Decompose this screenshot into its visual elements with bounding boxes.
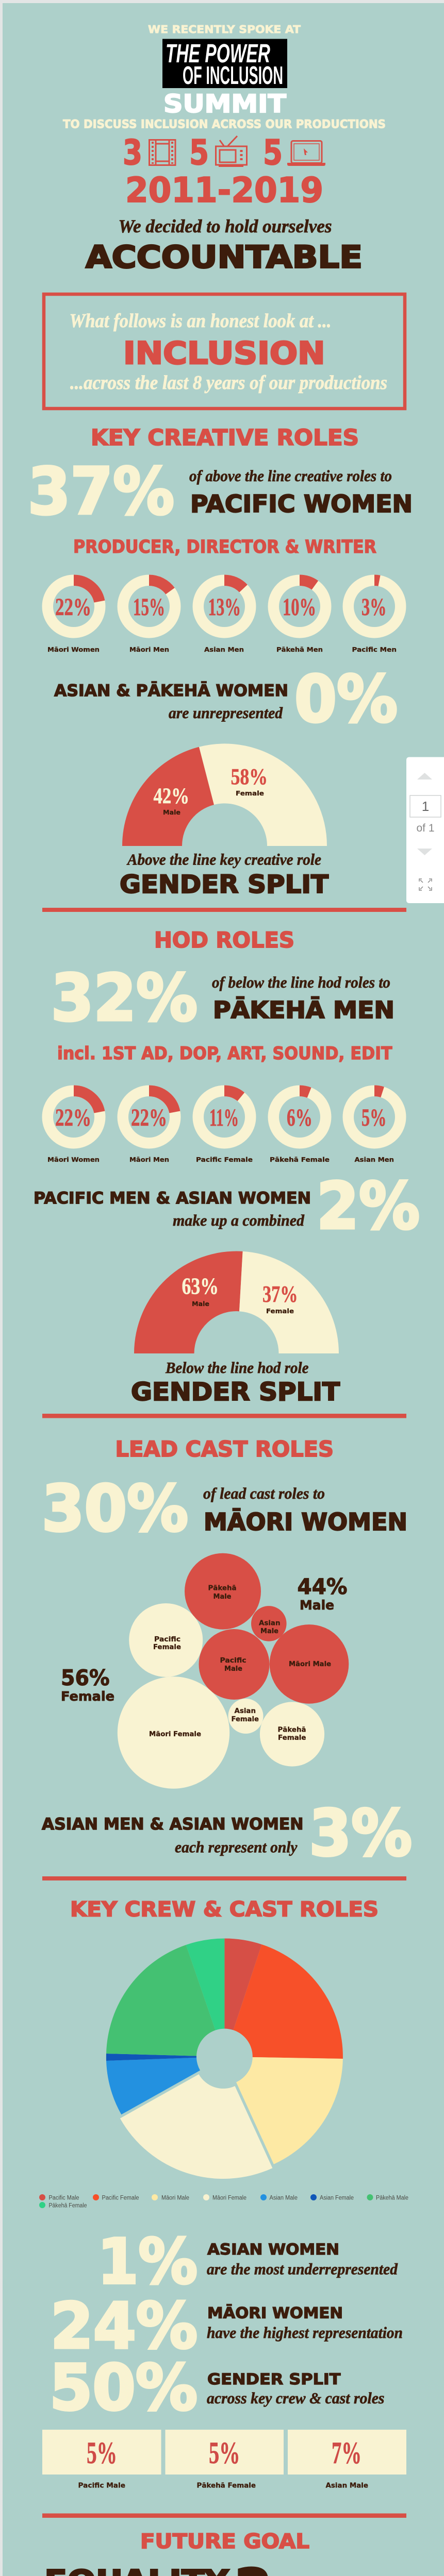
logo: the power of inclusion <box>162 39 287 90</box>
chart: crew and cast donut <box>106 1938 343 2179</box>
stat: 37 percent: 37% <box>28 454 174 529</box>
chart: gender split half donut: 42% <box>154 784 189 808</box>
header: summit intro <box>63 23 386 275</box>
stat: 50 percent: 50% <box>50 2351 198 2425</box>
text: across the last 8 years: ...across the last 8 years of our productions <box>70 372 387 394</box>
chart: bubble chart <box>61 1553 349 1789</box>
production counts with icons: 5 <box>263 132 283 173</box>
donut chart row: 15% <box>133 594 165 621</box>
chart: bubble chart: Pacific <box>220 1657 246 1665</box>
chart: bubble chart: 44% <box>297 1574 348 1599</box>
donut chart row: Pacific Female <box>196 1156 253 1163</box>
donut chart row: 13% <box>208 594 241 621</box>
chart: bubble chart: Māori Male <box>289 1660 331 1668</box>
chart: gender split half donut <box>122 743 327 846</box>
text: above the line: of above the line creative roles to <box>189 467 392 485</box>
chart: bubble chart: Female <box>61 1689 114 1704</box>
donut chart row: Pacific Men <box>352 646 397 653</box>
text: asian and pakeha women: ASIAN & PĀKEHĀ WOMEN <box>54 682 288 700</box>
chart legend: Asian Female <box>320 2195 354 2201</box>
chart legend: Pākehā Male <box>376 2195 408 2201</box>
text: maori women: MĀORI WOMEN <box>207 2304 343 2321</box>
section: key creative roles <box>28 425 413 899</box>
donut chart row: 22% <box>55 594 91 621</box>
chart: gender split half donut: Male <box>192 1300 209 1308</box>
stat boxes: 7% <box>332 2436 361 2470</box>
stat: 2 percent: 2% <box>317 1169 420 1244</box>
text: gender split: GENDER SPLIT <box>207 2370 341 2388</box>
chart: bubble chart: Pākehā <box>208 1585 236 1592</box>
stat boxes: 5% <box>87 2436 117 2470</box>
donut chart row: Asian Men <box>204 646 244 653</box>
text: make up a combined: make up a combined <box>173 1211 304 1229</box>
text: asian men and asian women: ASIAN MEN & ASIAN WOMEN <box>42 1815 303 1834</box>
text: accountable: ACCOUNTABLE <box>86 239 363 275</box>
chart: gender split half donut: 58% <box>231 764 268 789</box>
text: below the line: of below the line hod roles to <box>212 973 390 991</box>
chart: bubble chart: Pacific <box>154 1636 180 1643</box>
text: gender split: GENDER SPLIT <box>120 870 328 899</box>
chart: bubble chart: Male <box>224 1665 242 1673</box>
donut chart row: Māori Women <box>47 1156 100 1163</box>
text: date range: 2011-2019 <box>125 170 323 210</box>
chart: bubble chart: Female <box>153 1643 181 1651</box>
icon: television <box>216 136 246 166</box>
text: of lead cast roles: of lead cast roles to <box>203 1484 325 1502</box>
subheading: PRODUCER, DIRECTOR & WRITER <box>73 537 376 557</box>
donut chart row <box>47 1091 401 1163</box>
chart: bubble chart: Male <box>300 1598 334 1613</box>
text: most underrepresented: are the most underrepresented <box>207 2260 398 2278</box>
donut chart row: 22% <box>131 1104 167 1131</box>
section: future goal <box>36 2530 410 2576</box>
donut chart row: Pākehā Female <box>270 1156 330 1163</box>
chart legend: Māori Female <box>212 2195 246 2201</box>
text: gender split: GENDER SPLIT <box>131 1378 340 1406</box>
page control widget: of 1 <box>416 822 435 834</box>
page control widget <box>406 757 444 903</box>
chart legend: Pākehā Female <box>48 2203 87 2209</box>
donut chart row: 5% <box>361 1104 387 1131</box>
text: maori women: MĀORI WOMEN <box>204 1508 407 1536</box>
panel: inclusion callout <box>44 294 405 409</box>
text: pacific women: PACIFIC WOMEN <box>190 490 413 518</box>
chart: bubble chart: Female <box>231 1716 259 1723</box>
chart: gender split half donut: Female <box>266 1307 294 1315</box>
chart: bubble chart: Asian <box>259 1620 281 1627</box>
production counts with icons: 3 <box>123 132 142 173</box>
stat boxes: Pacific Male <box>78 2482 125 2489</box>
chart: gender split half donut: Male <box>163 808 180 816</box>
stat: 1 percent: 1% <box>97 2227 198 2298</box>
stat boxes: Asian Male <box>326 2482 368 2489</box>
section: key crew and cast roles <box>39 1898 408 2489</box>
donut chart row: Māori Men <box>129 1156 169 1163</box>
chart legend: Māori Male <box>161 2195 189 2201</box>
donut chart row: 22% <box>55 1104 91 1131</box>
stat boxes: 5% <box>209 2436 240 2470</box>
chart legend: Pacific Male <box>48 2195 79 2201</box>
text: above the line split: Above the line key creative role <box>126 850 321 869</box>
chart: bubble chart: Pākehā <box>277 1726 306 1734</box>
donut chart row: 10% <box>283 594 316 621</box>
chart: bubble chart: Male <box>260 1628 278 1635</box>
text: to discuss inclusion: TO DISCUSS INCLUSION ACROSS OUR PRODUCTIONS <box>63 118 386 131</box>
text: each represent only: each represent only <box>175 1838 298 1856</box>
heading: FUTURE GOAL <box>140 2530 309 2553</box>
stat: 24 percent: 24% <box>51 2290 198 2363</box>
text: are unrepresented: are unrepresented <box>169 704 283 722</box>
donut chart row: 6% <box>287 1104 313 1131</box>
text: pakeha men: PĀKEHĀ MEN <box>213 996 394 1024</box>
donut chart row: Māori Women <box>47 646 100 653</box>
stat boxes <box>42 2430 406 2489</box>
chart: gender split half donut: 37% <box>262 1281 298 1307</box>
chart legend: Asian Male <box>269 2195 298 2201</box>
stat: 0 percent: 0% <box>294 662 398 737</box>
stat boxes: Pākehā Female <box>197 2482 256 2489</box>
production counts with icons <box>123 132 325 173</box>
stat: 32 percent: 32% <box>51 961 198 1036</box>
text: summit: SUMMIT <box>163 90 286 118</box>
chart legend <box>39 2194 408 2209</box>
donut chart row: 3% <box>361 594 387 621</box>
heading: KEY CREATIVE ROLES <box>91 425 359 451</box>
text: across key crew: across key crew & cast roles <box>207 2389 385 2407</box>
logo: the power of inclusion: THE POWER <box>166 39 270 68</box>
stat: 3 percent: 3% <box>309 1797 412 1871</box>
chart: bubble chart: Male <box>213 1593 232 1601</box>
donut chart row: 11% <box>209 1104 239 1131</box>
chart: bubble chart: Māori Female <box>149 1731 201 1738</box>
subheading: incl. 1ST AD, DOP, ART, SOUND, EDIT <box>57 1043 392 1064</box>
donut chart row: Pākehā Men <box>276 646 323 653</box>
section: hod roles <box>34 927 420 1406</box>
heading: KEY CREW & CAST ROLES <box>70 1898 379 1922</box>
icon: film strip <box>150 140 175 165</box>
page control widget: 1 <box>422 799 429 814</box>
chart: bubble chart: 56% <box>61 1665 109 1690</box>
stat: 30 percent: 30% <box>42 1472 188 1546</box>
text: highest representation: have the highest representation <box>207 2324 403 2342</box>
donut chart row <box>47 580 401 653</box>
heading: HOD ROLES <box>154 927 294 953</box>
text: inclusion: INCLUSION <box>123 335 325 371</box>
text: we recently spoke at: WE RECENTLY SPOKE AT <box>148 23 301 36</box>
chart: gender split half donut: Female <box>236 789 264 797</box>
chart: gender split half donut <box>134 1251 339 1353</box>
text: asian women: ASIAN WOMEN <box>207 2241 339 2258</box>
text: what follows: What follows is an honest look at ... <box>69 310 331 332</box>
text: pacific men and asian women: PACIFIC MEN & ASIAN WOMEN <box>34 1189 311 1208</box>
chart: bubble chart: Female <box>278 1734 306 1742</box>
icon: laptop <box>287 141 325 166</box>
section: lead cast roles <box>42 1436 412 1871</box>
donut chart row: Māori Men <box>129 646 169 653</box>
donut chart row: Asian Men <box>355 1156 394 1163</box>
logo: the power of inclusion: OF INCLUSION <box>183 62 283 90</box>
chart legend: Pacific Female <box>102 2195 139 2201</box>
text: below the line split: Below the line hod role <box>165 1359 309 1377</box>
chart: gender split half donut: 63% <box>182 1274 219 1299</box>
text: we decided: We decided to hold ourselves <box>119 216 332 236</box>
heading: LEAD CAST ROLES <box>116 1436 334 1462</box>
production counts with icons: 5 <box>189 132 209 173</box>
chart: bubble chart: Asian <box>234 1707 256 1715</box>
